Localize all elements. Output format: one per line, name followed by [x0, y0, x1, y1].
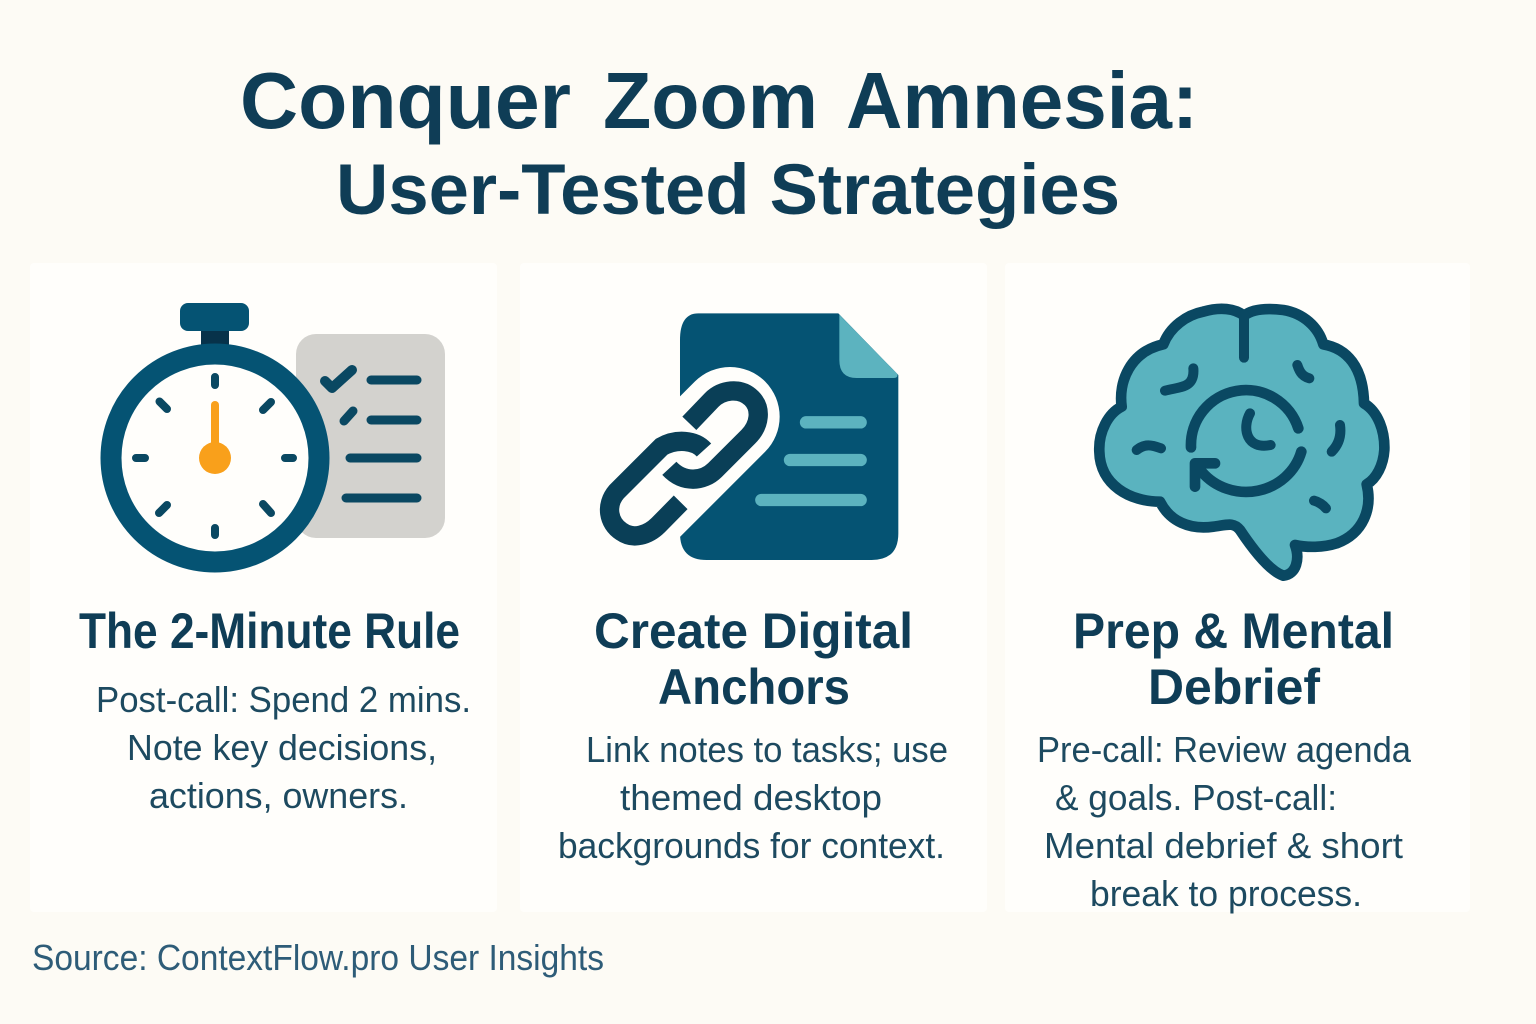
title: User-Tested Strategies — [336, 151, 1120, 230]
body text — [96, 679, 471, 816]
body text: Mental debrief & short — [1044, 825, 1403, 866]
icon: document with chain link — [610, 313, 898, 560]
title: Conquer — [240, 56, 571, 145]
heading: Create Digital — [594, 603, 913, 659]
title: Amnesia: — [846, 56, 1198, 145]
panel: prep and mental debrief — [1005, 263, 1470, 914]
panel: create digital anchors — [520, 263, 987, 912]
body text — [1037, 729, 1412, 914]
body text: Note key decisions, — [127, 727, 437, 768]
heading: The 2-Minute Rule — [79, 603, 460, 659]
title: Zoom — [603, 56, 818, 145]
body text: backgrounds for context. — [558, 825, 945, 866]
heading — [1073, 603, 1394, 715]
title — [240, 56, 1198, 230]
body text: actions, owners. — [149, 775, 408, 816]
heading: Debrief — [1148, 659, 1320, 715]
icon: stopwatch and checklist — [111, 303, 445, 562]
heading — [594, 603, 913, 715]
heading: Prep & Mental — [1073, 603, 1394, 659]
body text: themed desktop — [620, 777, 882, 818]
source note: Source: ContextFlow.pro User Insights — [32, 937, 604, 978]
body text: Pre-call: Review agenda — [1037, 729, 1412, 770]
body text — [558, 729, 948, 866]
body text: & goals. Post-call: — [1055, 777, 1337, 818]
body text: Post-call: Spend 2 mins. — [96, 679, 471, 720]
body text: Link notes to tasks; use — [586, 729, 948, 770]
heading: Anchors — [658, 659, 850, 715]
body text: break to process. — [1090, 873, 1362, 914]
panel: the 2-minute rule — [30, 263, 497, 912]
icon: brain with cycle arrow — [1099, 309, 1384, 576]
